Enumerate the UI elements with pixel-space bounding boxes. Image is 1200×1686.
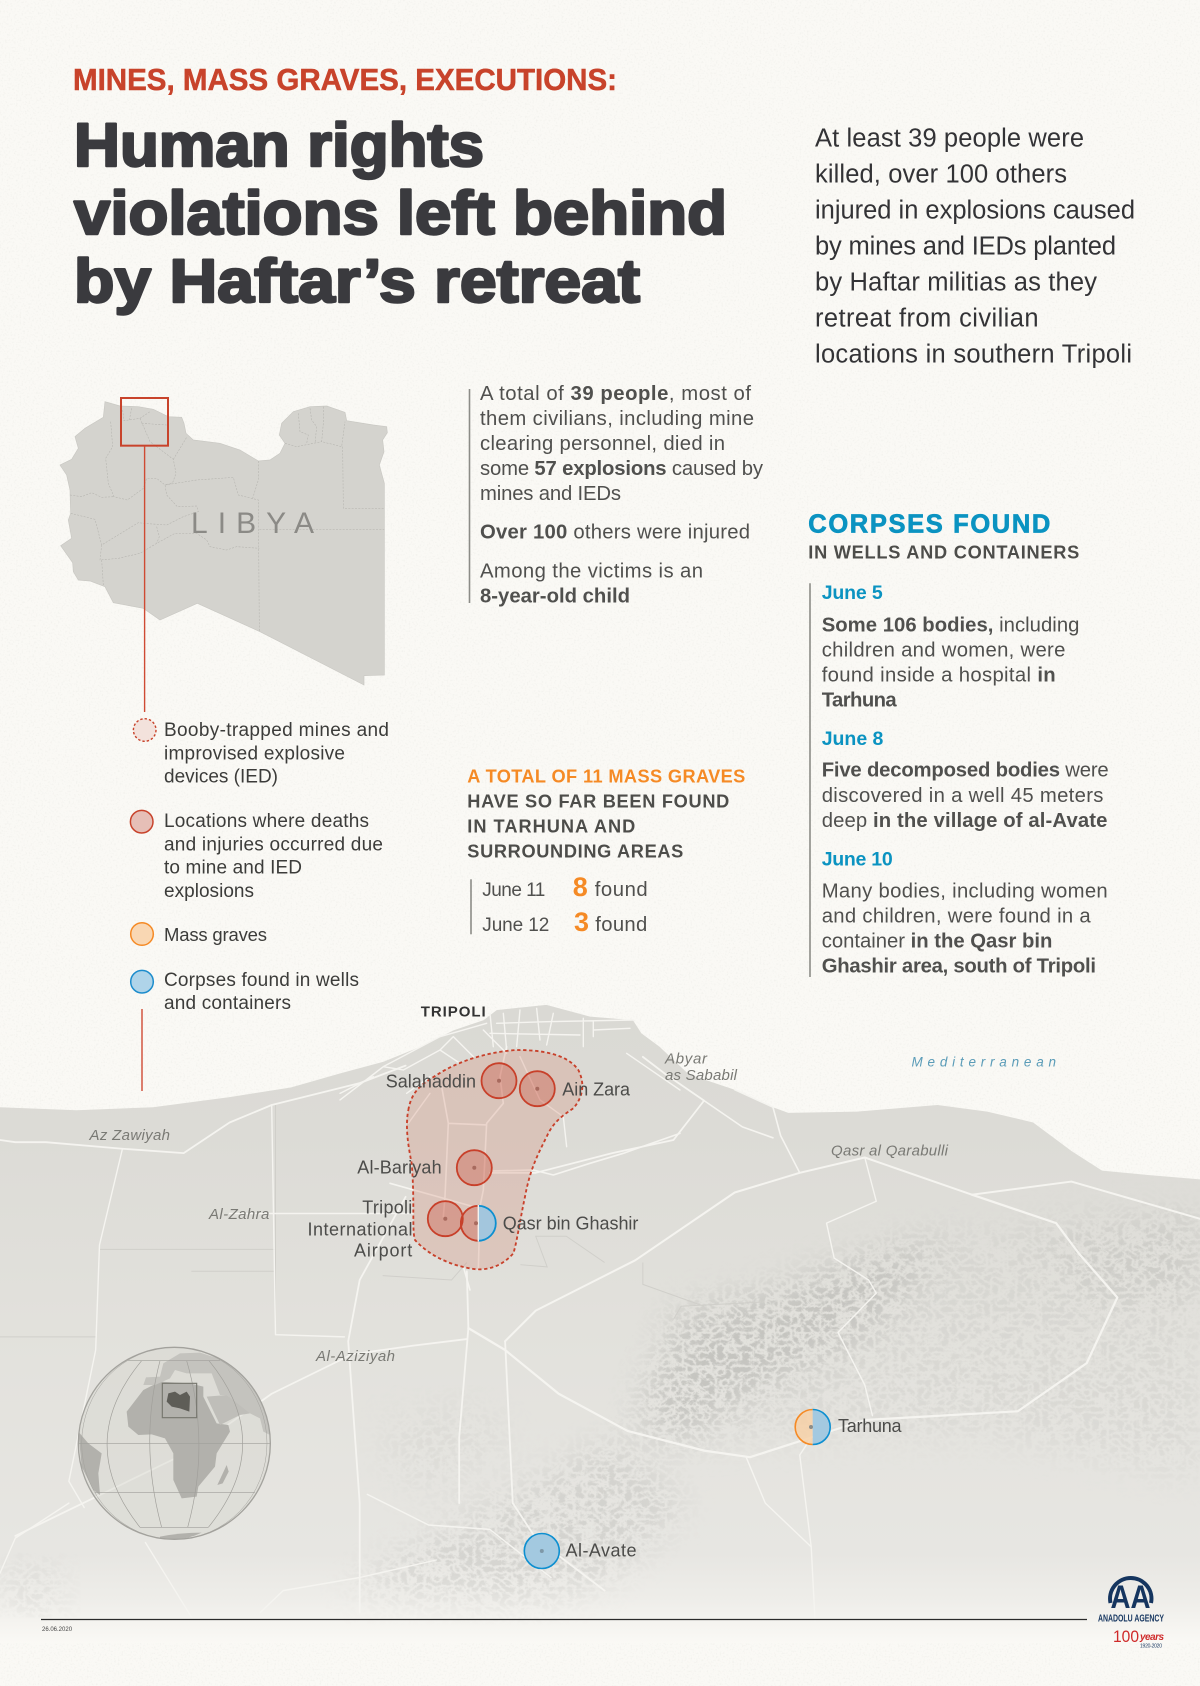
legend: corpses: and containers [164,993,291,1014]
mass graves dates: June 11 [482,880,545,901]
map labels: Salahaddin [386,1071,476,1091]
map labels: International [308,1219,412,1239]
legend: mass graves: Mass graves [164,924,267,945]
mass graves heading: SURROUNDING AREAS [467,841,683,861]
corpses timeline [810,582,1109,978]
legend: deaths and injuries: and injuries occurred due [164,834,383,855]
legend [130,719,389,1014]
dotted mine zone [407,1050,582,1269]
mass graves dates: June 12 [482,915,549,936]
mass graves heading [467,766,745,861]
stats text block [470,383,764,607]
main title: violations left behind [74,179,727,247]
stats text block: some 57 explosions caused by [480,458,764,480]
map labels: Qasr al Qarabulli [831,1142,949,1159]
corpses heading: CORPSES FOUND [808,511,1050,539]
stats text block: A total of 39 people, most of [480,383,751,405]
legend: mines: improvised explosive [164,743,345,764]
globe disc [78,1347,270,1539]
mass graves heading: HAVE SO FAR BEEN FOUND [467,791,729,811]
logo AA: AA [1110,1579,1150,1615]
corpses timeline: June 8 [822,728,884,750]
intro text [815,124,1135,368]
hill shading [0,1206,1200,1610]
date: 26.06.2020 [42,1627,73,1633]
map labels: Abyar [664,1050,708,1067]
marker: Salahaddin [482,1063,516,1098]
marker: Tripoli International Airport [428,1201,463,1236]
marker: Tarhuna [795,1410,830,1444]
map labels: Qasr bin Ghashir [503,1213,638,1233]
stats text block: them civilians, including mine [480,408,754,430]
corpses timeline: Some 106 bodies, including [822,615,1079,637]
map labels: as Sababil [665,1067,738,1084]
logo wordmark: ANADOLU AGENCY [1098,1614,1164,1624]
legend: deaths and injuries [130,810,383,902]
road network [0,1057,1200,1621]
intro text: locations in southern Tripoli [815,340,1132,368]
stats text block: clearing personnel, died in [480,433,725,455]
corpses timeline: Many bodies, including women [822,881,1108,903]
intro text: retreat from civilian [815,304,1038,332]
map labels: Airport [354,1241,412,1261]
corpses timeline: Tarhuna [822,690,897,712]
graticule [78,1361,271,1527]
mass graves dates: found [595,879,648,901]
globe inset [78,1347,273,1540]
stats text block: mines and IEDs [480,483,621,505]
legend: deaths and injuries: to mine and IED [164,858,302,879]
connector line to legend [144,446,146,712]
continents [78,1353,273,1540]
corpses timeline: June 10 [822,848,893,870]
stats text block: Over 100 others were injured [480,521,750,543]
corpses timeline: children and women, were [822,640,1065,662]
map labels [88,1004,1056,1560]
Libya shape [60,402,387,685]
marker: Al-Avate [524,1534,559,1568]
legend: mines: Booby-trapped mines and [164,720,389,741]
main title: Human rights [74,111,484,179]
intro text: by Haftar militias as they [815,268,1097,296]
corpses timeline: deep in the village of al-Avate [822,810,1107,832]
Anadolu Agency logo: 1920-2020 [1140,1644,1162,1650]
mass graves block [467,766,745,937]
mass graves dates: 3 [574,907,589,937]
marker: Al-Bariyah [457,1150,492,1185]
corpses heading [808,511,1079,563]
kicker heading: MINES, MASS GRAVES, EXECUTIONS: [73,63,617,97]
map labels: Al-Zahra [208,1206,269,1223]
corpses timeline: Ghashir area, south of Tripoli [822,956,1096,978]
marker: Ain Zara [520,1071,555,1106]
map labels: Al-Bariyah [357,1158,442,1178]
stats text block: 8-year-old child [480,585,630,607]
mass graves dates: 8 [573,872,588,902]
Libya label: LIBYA [191,507,314,540]
Libya locator map [60,398,387,685]
map labels: Ain Zara [562,1079,631,1099]
legend: mines [133,719,389,788]
legend: mines: devices (IED) [164,767,278,788]
legend: deaths and injuries: Locations where deaths [164,811,369,832]
globe rim [78,1347,270,1539]
intro text: At least 39 people were [815,124,1084,152]
map labels: Al-Aziziyah [315,1348,395,1365]
boundaries [0,1105,765,1337]
mass graves heading: A TOTAL OF 11 MASS GRAVES [467,766,745,786]
Anadolu Agency logo: years [1139,1632,1164,1643]
map labels: Al-Avate [566,1540,636,1560]
legend: corpses [131,970,359,1014]
corpses timeline: Five decomposed bodies were [822,760,1109,782]
mass graves heading: IN TARHUNA AND [467,816,635,836]
corpses timeline: container in the Qasr bin [822,931,1052,953]
legend: deaths and injuries: explosions [164,881,254,902]
corpses timeline: found inside a hospital in [822,665,1056,687]
connector line to map [141,1009,143,1091]
logo dome [1110,1578,1151,1603]
corpses timeline: and children, were found in a [822,906,1091,928]
locator box [162,1383,197,1418]
map labels: Mediterranean [912,1054,1056,1070]
footer rule [41,1618,1087,1620]
terrain map [0,1005,1200,1643]
map labels: TRIPOLI [421,1004,486,1021]
mass graves dates: found [595,914,647,936]
map labels: Tripoli [362,1197,412,1217]
intro text: injured in explosions caused [815,196,1135,224]
corpses timeline: discovered in a well 45 meters [822,785,1103,807]
Tripoli street grid [340,1008,680,1290]
100 years mark: 100 [1113,1627,1139,1646]
Libya on globe [167,1392,190,1412]
corpses timeline: June 5 [822,582,883,604]
legend: corpses: Corpses found in wells [164,970,359,991]
mass graves dates [471,872,648,937]
corpses heading: IN WELLS AND CONTAINERS [808,543,1079,563]
Anadolu Agency logo [1098,1578,1164,1650]
main title [74,111,727,315]
district borders [70,407,384,632]
marker: Qasr bin Ghashir [461,1205,496,1242]
stats text block: Among the victims is an [480,560,703,582]
intro text: killed, over 100 others [815,160,1067,188]
red locator square [121,398,168,446]
corpses found block [808,511,1109,978]
map labels: Tarhuna [838,1416,902,1436]
main title: by Haftar’s retreat [74,247,640,315]
intro text: by mines and IEDs planted [815,232,1116,260]
map labels: Az Zawiyah [88,1127,170,1144]
land mass [0,1005,1200,1643]
